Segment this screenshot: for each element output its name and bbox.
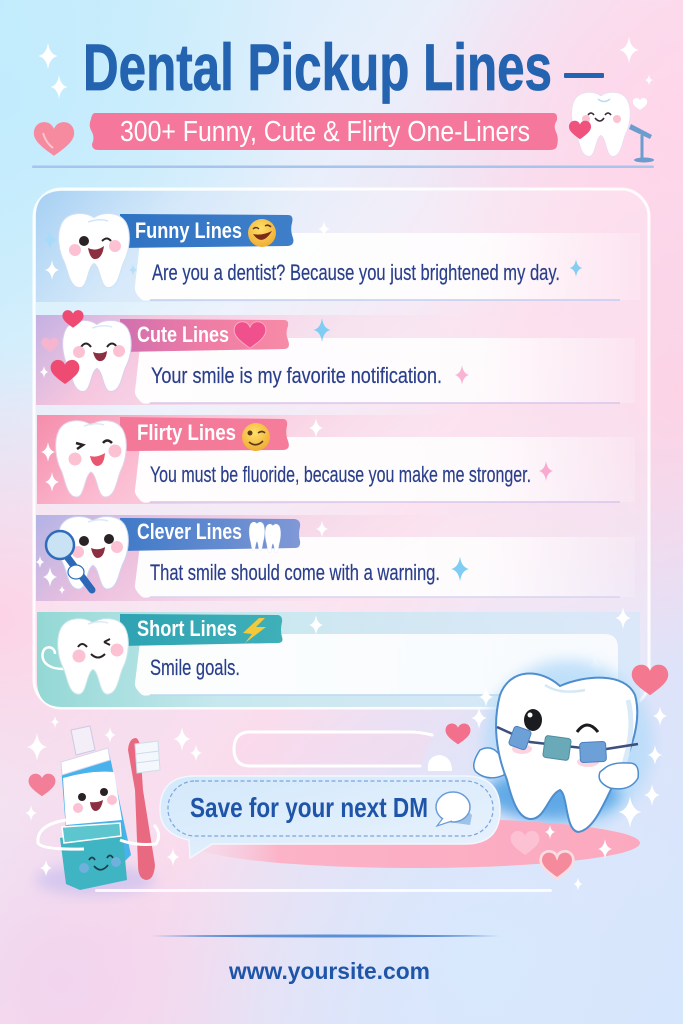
panel: pickup lines <box>34 189 649 708</box>
sparkles <box>41 418 553 492</box>
ribbon: short lines <box>120 614 282 646</box>
icon: tooth with swirl <box>42 619 128 694</box>
hearts and sparkles around big tooth <box>446 665 668 890</box>
quote card: funny: Are you a dentist? Because you just brightened my day. <box>152 260 560 285</box>
toothbrush <box>128 738 160 880</box>
icon: tooth with magnifier <box>46 517 128 590</box>
quote card: funny <box>135 233 640 301</box>
title divider <box>32 166 654 168</box>
ribbon: funny lines <box>120 214 293 248</box>
ribbon: cute lines: Cute Lines <box>137 322 229 347</box>
quote card: cute: Your smile is my favorite notification. <box>151 363 442 388</box>
icon: toothpaste tooth and floss characters <box>25 716 202 895</box>
sparkles <box>309 607 631 676</box>
small hearts and sparkles <box>25 716 202 876</box>
footer url: www.yoursite.com <box>228 958 430 984</box>
big tooth glow <box>483 660 653 830</box>
sparkles <box>43 221 582 280</box>
footer divider <box>150 934 500 938</box>
quote card: flirty: You must be fluoride, because you make me stronger. <box>150 462 531 487</box>
sparkles <box>36 520 469 594</box>
right arm <box>599 763 638 789</box>
ribbon: flirty lines: Flirty Lines <box>137 420 236 445</box>
bottom white line <box>95 889 552 892</box>
icon: heart emoji <box>234 322 266 348</box>
panel: clever lines row <box>36 515 640 601</box>
speech bubble: save for your next DM: Save for your next DM <box>190 792 428 823</box>
icon: heart left <box>34 122 74 156</box>
arms <box>474 748 505 778</box>
blank white outline shape <box>234 732 452 771</box>
floss box <box>38 820 159 890</box>
icon: lightning bolt <box>243 618 266 643</box>
icon: grin emoji <box>248 219 276 247</box>
pink floor ellipse <box>190 818 640 868</box>
ribbon: clever lines <box>120 518 300 551</box>
ribbon: funny lines: Funny Lines <box>135 218 242 243</box>
quote card: clever: That smile should come with a warning. <box>150 560 440 585</box>
ribbon: flirty lines <box>120 417 289 451</box>
toothpaste tube <box>61 726 131 868</box>
toothpaste glow <box>35 865 155 895</box>
panel: short lines row <box>37 607 640 707</box>
ribbon: short lines: Short Lines <box>137 616 237 641</box>
quote card: flirty <box>135 437 635 503</box>
sparkles <box>40 318 469 385</box>
ribbon: cute lines <box>120 319 289 352</box>
quote card: cute <box>135 338 635 404</box>
icon: big tooth with braces <box>474 673 638 832</box>
quote card: short <box>135 634 618 696</box>
subtitle ribbon: 300+ Funny, Cute & Flirty One-Liners <box>120 116 530 148</box>
face <box>524 709 542 731</box>
icon: wink emoji <box>242 423 270 451</box>
panel: funny lines row <box>36 191 640 302</box>
panel: flirty lines row <box>37 415 640 504</box>
tooth body <box>496 673 637 832</box>
speech bubble: save for your next DM <box>160 776 500 858</box>
icon: tooth winking <box>59 214 129 288</box>
panel: cute lines row <box>36 310 640 405</box>
ribbon: clever lines: Clever Lines <box>137 519 242 544</box>
braces <box>497 726 638 763</box>
icon: tooth with microphone <box>569 92 654 162</box>
icon: chat bubble <box>436 792 472 826</box>
icon: tooth flirty wink <box>56 421 126 497</box>
icon: two teeth <box>249 522 281 553</box>
icon: tooth happy with hearts <box>41 310 131 392</box>
quote card: short: Smile goals. <box>150 655 240 680</box>
sparkles top <box>38 36 653 99</box>
quote card: clever <box>135 537 635 598</box>
